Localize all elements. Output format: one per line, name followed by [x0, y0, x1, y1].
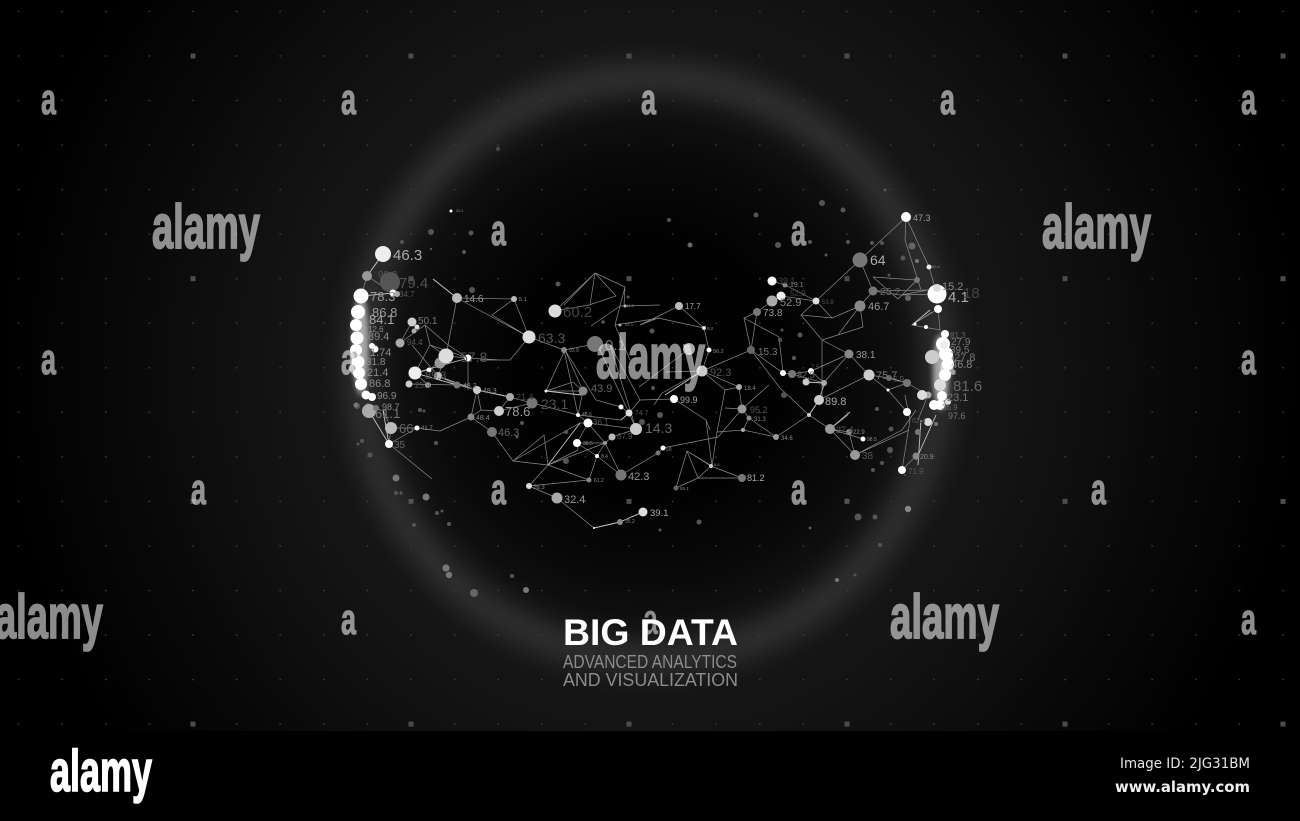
node value labels: 48.6	[582, 412, 592, 418]
node value labels: 8.4	[601, 454, 608, 460]
scattered background particles	[354, 147, 911, 597]
node value labels: 23.1	[541, 396, 568, 412]
node value labels: 75.7	[876, 370, 897, 382]
watermarks: small a marks: a	[940, 75, 955, 124]
watermarks: small a marks: a	[1091, 465, 1106, 514]
brighter link accents	[361, 254, 936, 528]
watermarks: small a marks: a	[1241, 335, 1256, 384]
watermarks: small a marks: a	[41, 75, 56, 124]
node value labels: 6.9	[893, 375, 905, 384]
watermarks: large alamy	[0, 193, 1151, 652]
node value labels: 36.9	[942, 403, 958, 412]
node value labels: 36.1	[593, 418, 609, 427]
small a mark behind title: a	[643, 595, 658, 644]
node value labels: 47.3	[913, 213, 931, 223]
node value labels: 60.2	[563, 304, 592, 321]
node value labels: 8.5	[714, 462, 720, 467]
node value labels: 18	[963, 285, 980, 302]
node value labels: 19.1	[790, 282, 804, 289]
node value labels: 9.2	[707, 326, 714, 331]
node value labels: 78.3	[370, 289, 395, 304]
node value labels: 36.6	[626, 303, 635, 308]
node value labels: 25.1	[456, 208, 465, 213]
watermarks: small a marks: a	[491, 206, 506, 255]
watermarks: small a marks	[41, 75, 1256, 644]
node value labels: 59	[666, 447, 672, 453]
node value labels: 67.9	[617, 432, 633, 441]
node value labels: 52.9	[780, 297, 801, 309]
node value labels: 12.6	[368, 325, 384, 334]
node value labels: 61.2	[594, 478, 604, 484]
node value labels: 32.3	[625, 322, 634, 327]
node value labels: 41.7	[421, 426, 433, 432]
node value labels: 46.8	[951, 359, 972, 371]
image id: Image ID: 2JG31BM	[1120, 756, 1250, 772]
node value labels: 39.5	[950, 345, 970, 356]
node value labels: 0.1	[605, 337, 626, 354]
node value labels: 22.9	[853, 430, 865, 436]
node value labels: 27.4	[836, 425, 854, 435]
node value labels: 34.7	[399, 290, 415, 299]
node value labels: 53.8	[822, 300, 834, 306]
node value labels: 34.6	[781, 436, 793, 442]
node value labels: 62.4	[912, 418, 926, 425]
node value labels: 31.3	[754, 417, 766, 423]
watermarks: small a marks: a	[341, 335, 356, 384]
node value labels: 35	[394, 440, 406, 451]
node value labels: 15.3	[758, 347, 778, 358]
node value labels: 71.9	[908, 467, 924, 476]
watermarks: small a marks: a	[341, 75, 356, 124]
node value labels: 43.9	[591, 383, 612, 395]
node value labels: 38.5	[583, 441, 593, 447]
watermarks: small a marks: a	[1241, 75, 1256, 124]
node value labels: 27.8	[954, 352, 975, 364]
node value labels: 42.3	[628, 471, 649, 483]
watermarks: small a marks: a	[1241, 595, 1256, 644]
node value labels: 38.1	[856, 350, 876, 361]
node value labels: 78.6	[505, 404, 530, 419]
node value labels: 89.4	[368, 331, 389, 343]
node value labels: 38	[862, 451, 874, 462]
node value labels: 31.8	[366, 357, 386, 368]
node value labels: 52.9	[790, 289, 806, 298]
node value labels: 56.2	[713, 349, 724, 355]
alamy logo: alamy	[50, 739, 152, 804]
node value labels: 64	[870, 252, 886, 268]
node value labels: 48.4	[476, 415, 490, 422]
node value labels: 86.8	[369, 378, 390, 390]
node value labels: 98.8	[378, 270, 398, 281]
watermarks: small a marks: a	[641, 75, 656, 124]
watermarks: small a marks: a	[491, 465, 506, 514]
node value labels: 97.6	[948, 411, 966, 421]
node value labels: 46.7	[868, 301, 889, 313]
left cluster bright arc	[348, 271, 400, 418]
node value labels: 14.6	[464, 294, 484, 305]
node value labels: 61.1	[375, 406, 400, 421]
node value labels: 26.3	[533, 485, 545, 491]
node value labels: 94.4	[407, 338, 423, 347]
node value labels: 98.5	[867, 437, 877, 443]
node value labels: 82.5	[797, 370, 815, 380]
node value labels: 66	[399, 421, 413, 436]
node value labels: 81.2	[747, 473, 765, 483]
node value labels: 81.6	[953, 378, 982, 395]
website: www.alamy.com	[1115, 778, 1250, 796]
node value labels: 21.4	[367, 367, 388, 379]
watermarks: large alamy: alamy	[0, 583, 103, 652]
node value labels: 50.1	[418, 316, 438, 327]
node value labels: 25.9	[415, 381, 431, 390]
network links	[361, 217, 940, 528]
node value labels: 86.8	[372, 305, 397, 320]
subtitle: AND VISUALIZATION	[563, 670, 738, 690]
title: BIG DATA	[563, 612, 738, 653]
node value labels: 95.2	[750, 405, 768, 415]
watermarks: large alamy: alamy	[596, 323, 705, 392]
watermarks: large alamy: alamy	[1042, 193, 1151, 262]
node value labels: 39.1	[650, 508, 668, 519]
node value labels: 39.1	[778, 276, 796, 286]
watermarks: small a marks: a	[791, 206, 806, 255]
node value labels: 81.3	[950, 331, 966, 340]
node value labels: 14.3	[645, 420, 672, 436]
node value labels: 15.2	[942, 281, 963, 293]
node value labels: 32.4	[564, 494, 585, 506]
data nodes	[372, 210, 920, 529]
node value labels: 74.7	[635, 410, 649, 417]
node value labels: 63.4	[932, 264, 941, 269]
node value labels: 7.5	[811, 365, 820, 371]
node value labels: 57.8	[460, 349, 487, 365]
node value labels: 73.8	[763, 308, 783, 319]
node value labels: 98.7	[382, 402, 400, 412]
node value labels: 4.1	[948, 289, 969, 306]
node value labels: 89.3	[425, 370, 446, 382]
node value labels: 20.9	[920, 454, 934, 461]
watermarks: small a marks: a	[341, 595, 356, 644]
node value labels: 55.1	[680, 486, 689, 491]
watermarks: small a marks: a	[791, 465, 806, 514]
watermarks: small a marks: a	[940, 335, 955, 384]
watermarks: small a marks: a	[191, 465, 206, 514]
watermarks: small a marks: a	[41, 335, 56, 384]
node value labels: 5.1	[519, 297, 527, 303]
node value labels: 89.8	[825, 396, 846, 408]
node value labels: 84.1	[369, 312, 394, 327]
node value labels: 63.3	[538, 330, 565, 346]
subtitle: ADVANCED ANALYTICS	[563, 652, 737, 672]
node value labels: 93.9	[569, 348, 579, 354]
right cluster bright arc	[900, 242, 954, 435]
node value labels: 17.7	[685, 302, 701, 311]
watermarks: large alamy: alamy	[152, 193, 260, 262]
node value labels: 79.4	[399, 275, 428, 292]
node value labels: 21.4	[516, 392, 534, 402]
subtitle	[563, 652, 738, 690]
node value labels: 1.74	[370, 347, 391, 359]
node value labels: 18.4	[744, 386, 756, 392]
node value labels: 27.9	[951, 337, 971, 348]
node value labels: 92.3	[710, 367, 731, 379]
node value labels: 35.2	[625, 519, 635, 525]
node value labels: 96.9	[377, 391, 397, 402]
node value labels	[366, 208, 982, 525]
node value labels: 48.3	[483, 388, 497, 395]
node value labels: 25.2	[880, 286, 901, 298]
node value labels: 99.9	[680, 395, 698, 405]
node value labels: 23.1	[947, 392, 968, 404]
node value labels: 46.3	[498, 427, 519, 439]
node value labels: 46.3	[393, 247, 422, 264]
watermarks: large alamy: alamy	[890, 583, 999, 652]
node value labels: 48.2	[463, 383, 477, 390]
